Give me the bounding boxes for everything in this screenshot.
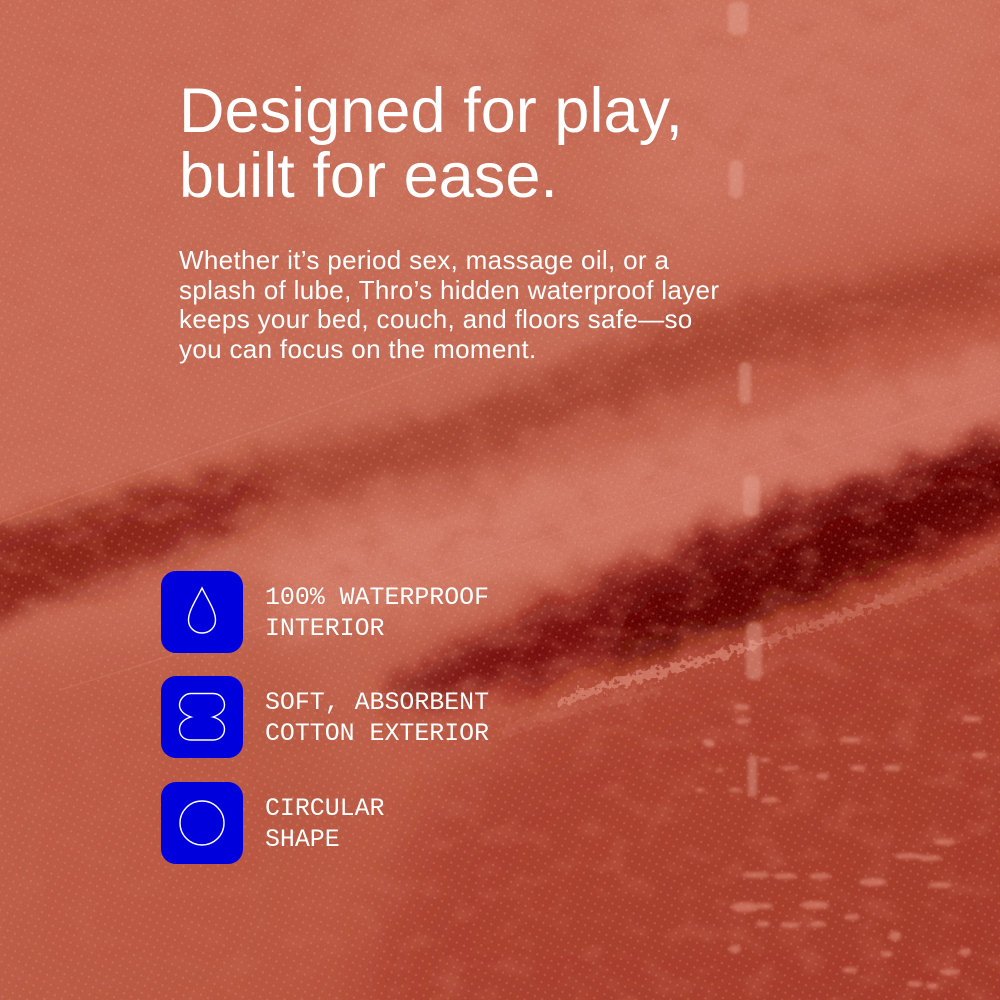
icon: water drop <box>161 571 243 653</box>
icon: circle <box>161 782 243 864</box>
thin fold creases <box>0 363 1000 690</box>
wet foam highlight along fold <box>500 550 1000 735</box>
body text: splash of lube, Thro’s hidden waterproof layer <box>179 275 719 305</box>
body text: Whether it’s period sex, massage oil, or a <box>179 245 669 275</box>
lower saturated wet cloth <box>360 570 1000 1000</box>
body text: you can focus on the moment. <box>179 334 537 364</box>
falling water drops <box>728 2 762 797</box>
feature label: circular shape <box>265 795 384 854</box>
title: Designed for play, <box>179 76 683 146</box>
feature label: waterproof: INTERIOR <box>265 615 384 643</box>
water droplets pooling in the lower right <box>695 704 988 989</box>
body text: keeps your bed, couch, and floors safe—so <box>179 304 693 334</box>
feature label: circular shape: CIRCULAR <box>265 795 384 823</box>
body text <box>179 245 719 364</box>
title: built for ease. <box>179 141 558 211</box>
dark left end of the band <box>0 470 270 625</box>
title <box>179 76 683 211</box>
long medium shadow band rising to the right <box>0 245 1000 625</box>
deep dark fold <box>380 425 1000 705</box>
icon: folded blanket shape <box>161 676 243 758</box>
feature label: cotton: COTTON EXTERIOR <box>265 720 489 748</box>
feature label: waterproof <box>265 584 489 643</box>
pale lit band between folds <box>260 330 1000 640</box>
feature label: waterproof: 100% WATERPROOF <box>265 584 489 612</box>
feature label: cotton: SOFT, ABSORBENT <box>265 689 489 717</box>
feature label: cotton <box>265 689 489 748</box>
feature label: circular shape: SHAPE <box>265 826 340 854</box>
